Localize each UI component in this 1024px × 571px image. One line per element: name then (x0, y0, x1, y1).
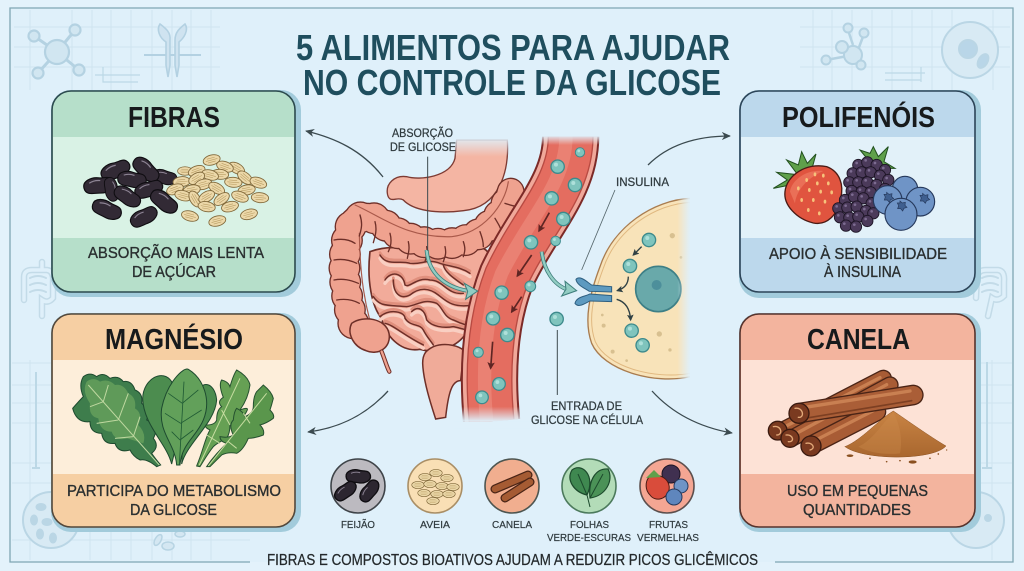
icon: receptor top left (144, 24, 201, 77)
heading: magnesio: MAGNÉSIO (105, 322, 243, 356)
panel: polifenois (739, 90, 981, 298)
cell right cover (690, 195, 695, 382)
title: NO CONTROLE DA GLICOSE (303, 62, 721, 103)
caption: magnesio: DA GLICOSE (130, 502, 217, 519)
icon: molecule top right (822, 24, 868, 70)
illustration: black beans and oats (83, 153, 269, 231)
icon: cell bottom right (948, 492, 1004, 548)
arrow: to magnesio (308, 391, 388, 432)
caption: polifenois: À INSULINA (824, 262, 901, 281)
label: aveia: AVEIA (420, 519, 450, 531)
small intestine (369, 246, 495, 351)
panel: fibras (51, 90, 301, 297)
label: absorcao de glicose: DE GLICOSE (390, 140, 456, 154)
arrow: to fibras (306, 131, 383, 177)
caption: polifenois (769, 244, 947, 281)
rectum (423, 345, 464, 419)
nucleus (636, 266, 681, 312)
glucose dots in vessel (473, 148, 585, 404)
heading: polifenois: POLIFENÓIS (782, 100, 935, 134)
icon: canela (485, 459, 539, 513)
label: entrada de glicose na celula: GLICOSE NA CÉLULA (531, 412, 643, 427)
insulin receptor (575, 278, 612, 305)
caption: magnesio (67, 483, 281, 519)
label: canela: CANELA (492, 519, 532, 531)
vessel bottom cover (453, 422, 533, 428)
stomach (387, 140, 508, 212)
arrow: to canela (652, 391, 732, 433)
heading: fibras: FIBRAS (128, 102, 220, 134)
label: frutas vermelhas: VERMELHAS (637, 532, 699, 544)
arrows in vessel (491, 213, 549, 368)
label: absorcao de glicose (390, 126, 456, 154)
arrow: absorption into vessel (427, 250, 478, 299)
icon: folhas (562, 459, 616, 513)
arrow: to polifenois (648, 136, 730, 165)
arrow: glucose to receptor (542, 252, 577, 296)
icon: cell bottom left (23, 492, 79, 548)
large intestine (334, 182, 522, 372)
caption: canela: QUANTIDADES (803, 502, 911, 519)
panel: canela (739, 313, 981, 532)
leader line: absorcao (426, 157, 429, 251)
leader line: entrada (556, 330, 559, 395)
cell (588, 195, 695, 382)
label: feijao: FEIJÃO (341, 518, 375, 531)
vessel top fade (533, 135, 607, 145)
title (296, 27, 730, 103)
arrows in cell (617, 247, 642, 320)
cell right fade (677, 195, 690, 382)
glucose outside cell (550, 312, 563, 326)
label: insulina: INSULINA (616, 175, 669, 189)
blood vessel (485, 137, 571, 422)
vessel bottom fade (453, 407, 533, 422)
caption: fibras: ABSORÇÃO MAIS LENTA (88, 242, 264, 262)
leader line: insulina (582, 190, 615, 270)
caption: polifenois: APOIO À SENSIBILIDADE (769, 244, 947, 263)
title: 5 ALIMENTOS PARA AJUDAR (296, 27, 730, 68)
icon: feijao (331, 459, 385, 513)
caption: magnesio: PARTICIPA DO METABOLISMO (67, 483, 281, 500)
label: entrada de glicose na celula: ENTRADA DE (551, 399, 622, 413)
illustration: red berries (773, 147, 935, 232)
illustration: green leaves (73, 369, 274, 467)
icon: aveia (408, 459, 462, 513)
label: folhas verde-escuras (547, 519, 631, 544)
legend: food icons (331, 459, 699, 544)
diagram: digestive system, blood vessel and cell (334, 135, 695, 428)
footer message: FIBRAS E COMPOSTOS BIOATIVOS AJUDAM A REDUZIR PICOS GLICÊMICOS (267, 552, 758, 569)
stomach top fade (452, 137, 512, 157)
icon: frutas (640, 459, 694, 513)
icon: intestine right (976, 270, 1004, 316)
label: absorcao de glicose: ABSORÇÃO (392, 126, 453, 140)
panel: magnesio (51, 313, 301, 532)
caption: fibras: DE AÇÚCAR (132, 262, 216, 281)
label: frutas vermelhas (637, 519, 699, 544)
icon: cell top right (942, 22, 998, 78)
heading: canela: CANELA (807, 324, 910, 356)
caption: canela (787, 483, 928, 519)
glucose in cell (623, 233, 656, 352)
caption: canela: USO EM PEQUENAS (787, 483, 928, 500)
icon: intestine left (24, 262, 53, 316)
label: entrada de glicose na celula (531, 399, 643, 427)
illustration: cinnamon sticks and powder (768, 378, 947, 464)
label: frutas vermelhas: FRUTAS (649, 519, 688, 531)
caption: fibras (88, 242, 264, 281)
icon: molecule top left (28, 24, 84, 78)
label: folhas verde-escuras: FOLHAS (570, 519, 609, 531)
decoration: scattered seeds (152, 531, 185, 550)
label: folhas verde-escuras: VERDE-ESCURAS (547, 532, 631, 544)
